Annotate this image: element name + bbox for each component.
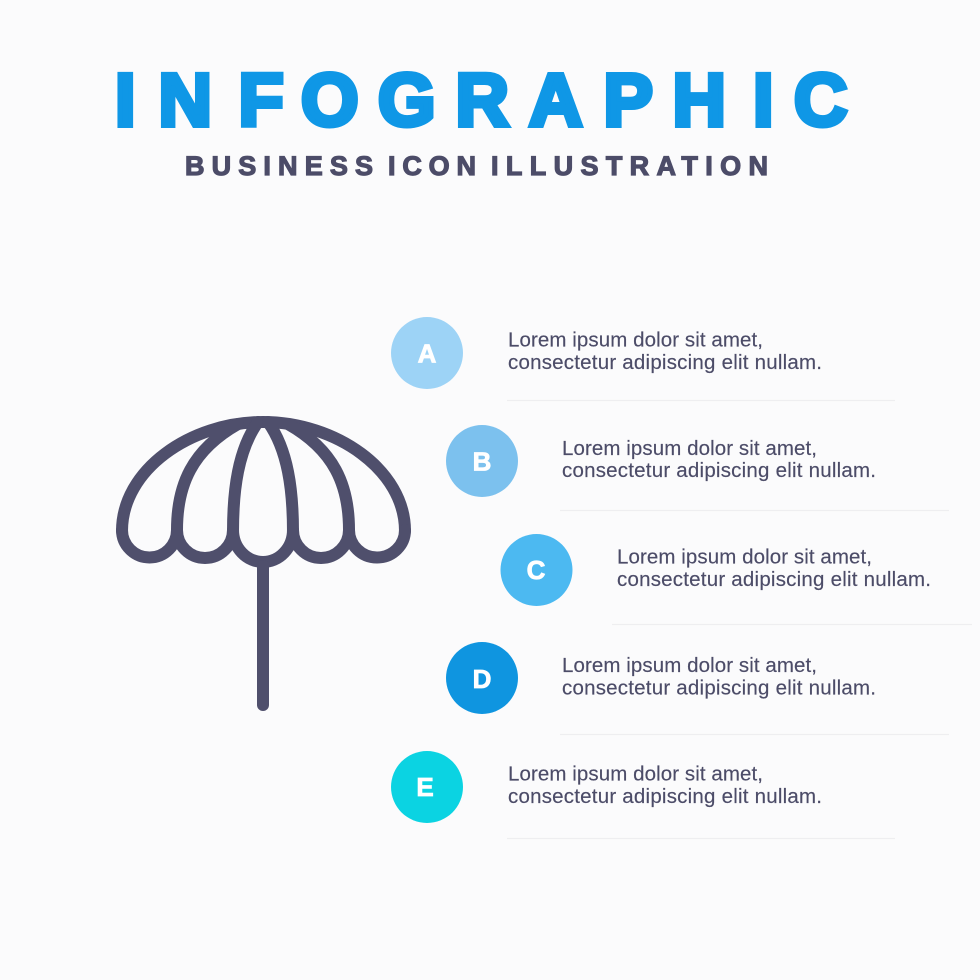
- item A: [391, 317, 895, 400]
- text E: Lorem ipsum dolor sit amet,: [508, 762, 763, 786]
- title: INFOGRAPHIC: [115, 58, 847, 142]
- text A line 2: consectetur adipiscing elit nullam.: [508, 351, 822, 374]
- item B: [446, 425, 949, 510]
- badge B: [446, 425, 518, 497]
- text B: Lorem ipsum dolor sit amet,: [562, 437, 817, 460]
- subtitle: [185, 151, 768, 181]
- letter B: B: [473, 446, 491, 476]
- badge C: [500, 534, 572, 606]
- letter D: D: [473, 664, 491, 694]
- text C line 2: consectetur adipiscing elit nullam.: [617, 568, 931, 591]
- icon: beach umbrella: [122, 422, 405, 705]
- text B line 2: consectetur adipiscing elit nullam.: [562, 459, 876, 482]
- item E: [391, 751, 895, 838]
- text E line 2: consectetur adipiscing elit nullam.: [508, 785, 822, 808]
- subtitle: ICON: [388, 151, 476, 181]
- subtitle: BUSINESS: [185, 151, 373, 181]
- text D line 2: consectetur adipiscing elit nullam.: [562, 676, 876, 700]
- letter A: A: [418, 338, 437, 368]
- subtitle: ILLUSTRATION: [491, 151, 768, 181]
- letter E: E: [416, 772, 434, 802]
- item C: [500, 534, 972, 624]
- item D: [446, 642, 949, 734]
- letter C: C: [527, 555, 546, 585]
- badge D: [446, 642, 518, 714]
- badge A: [391, 317, 463, 389]
- text C: Lorem ipsum dolor sit amet,: [617, 546, 872, 568]
- text A: Lorem ipsum dolor sit amet,: [508, 328, 763, 352]
- badge E: [391, 751, 463, 823]
- text D: Lorem ipsum dolor sit amet,: [562, 654, 817, 677]
